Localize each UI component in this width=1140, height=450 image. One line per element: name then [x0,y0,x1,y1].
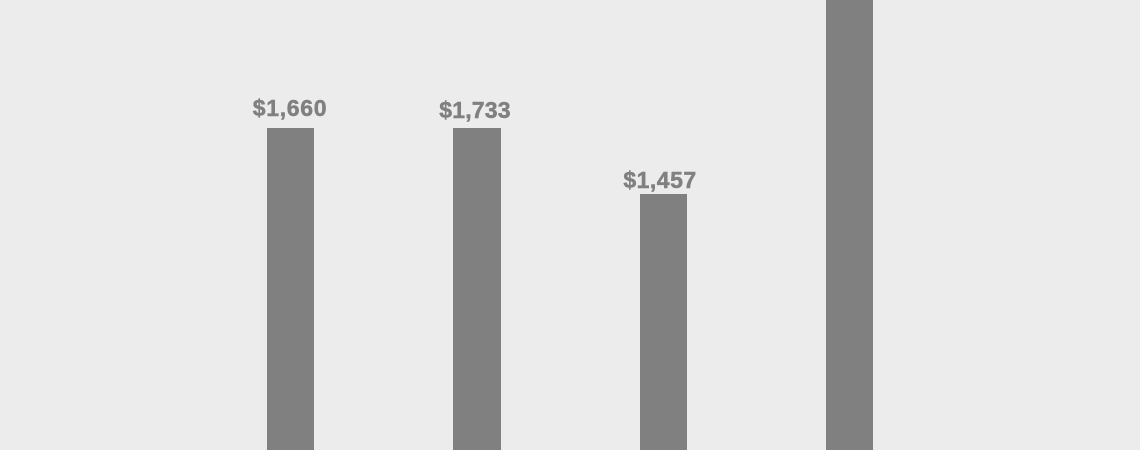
value label: $1,660: $1,660 [253,95,327,121]
value label: $1,733: $1,733 [439,97,511,123]
bar: $1,457 [640,194,687,450]
value label: $1,457: $1,457 [623,167,697,193]
bar: tallest, cropped at top [826,0,873,450]
bar: $1,660 [267,128,314,450]
bar: $1,733 [453,128,501,450]
